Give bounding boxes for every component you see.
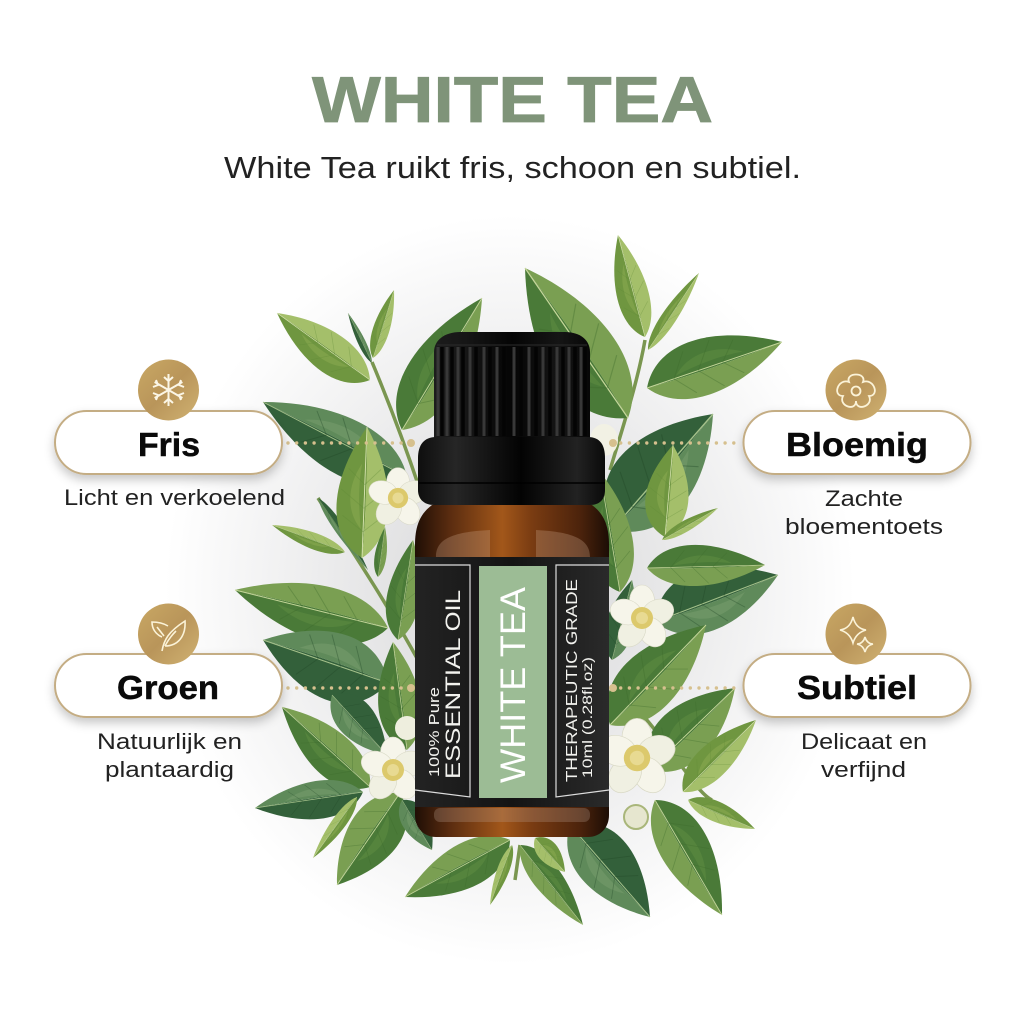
pill [55, 654, 282, 717]
heading: Fris [138, 426, 200, 463]
connector: Subtiel [609, 684, 738, 692]
heading: Bloemig [786, 426, 928, 463]
card: Bloemig [744, 360, 970, 539]
label: green panel: WHITE TEA [494, 586, 533, 783]
description [97, 729, 242, 782]
description: bloementoets [785, 514, 943, 539]
icon: flower [826, 360, 886, 420]
card: Groen [55, 604, 282, 782]
label: right panel: 10ml (0.28fl.oz) [580, 657, 595, 778]
description: Licht en verkoelend [64, 485, 285, 510]
pill [744, 411, 970, 474]
description: Natuurlijk en [97, 729, 242, 754]
bottle [415, 332, 609, 837]
label: green panel [479, 566, 547, 798]
botanical arrangement: tea leaves and flowers [228, 231, 791, 934]
label: right panel [556, 565, 609, 797]
card: Subtiel [744, 604, 970, 782]
bottle label [415, 557, 609, 807]
description: Delicaat en [801, 729, 927, 754]
icon: sparkles [826, 604, 886, 664]
subtitle: White Tea ruikt fris, schoon en subtiel. [224, 150, 801, 185]
label: left panel: ESSENTIAL OIL [442, 590, 465, 779]
connector: Bloemig [609, 439, 738, 447]
icon: snowflake [138, 360, 199, 420]
bottle cap [434, 332, 590, 438]
bottle collar [418, 437, 605, 505]
bottle body [415, 505, 609, 837]
heading: Groen [117, 669, 219, 706]
description: plantaardig [105, 757, 234, 782]
description: verfijnd [821, 757, 906, 782]
description: Zachte [825, 486, 903, 511]
title: WHITE TEA [312, 63, 713, 136]
connector: Fris [288, 439, 416, 447]
icon: leaves [138, 604, 199, 664]
description [785, 486, 943, 539]
label: right panel: THERAPEUTIC GRADE [564, 579, 581, 782]
heading: Subtiel [797, 669, 917, 706]
pill [744, 654, 970, 717]
connector: Groen [288, 684, 416, 692]
label: left panel [415, 565, 470, 797]
pill [55, 411, 282, 474]
description [801, 729, 927, 782]
card: Fris [55, 360, 285, 510]
label: left panel: 100% Pure [426, 687, 443, 777]
